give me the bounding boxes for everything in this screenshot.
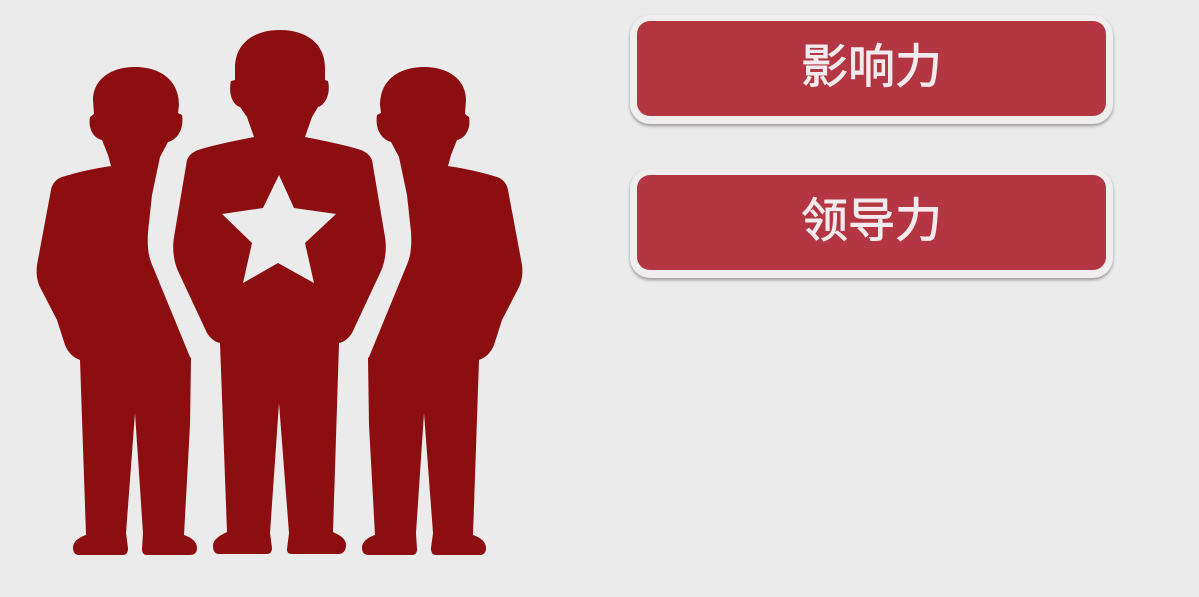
button: 影响力 bbox=[637, 21, 1106, 116]
icon: centre figure with star bbox=[173, 30, 386, 554]
button: 影响力: 影响力 bbox=[801, 40, 942, 93]
icon: left figure bbox=[37, 67, 197, 555]
button: 领导力: 领导力 bbox=[801, 194, 942, 247]
icon: right figure bbox=[362, 67, 522, 555]
illustration: three standing figures bbox=[36, 30, 522, 555]
button: 领导力 bbox=[637, 175, 1106, 270]
